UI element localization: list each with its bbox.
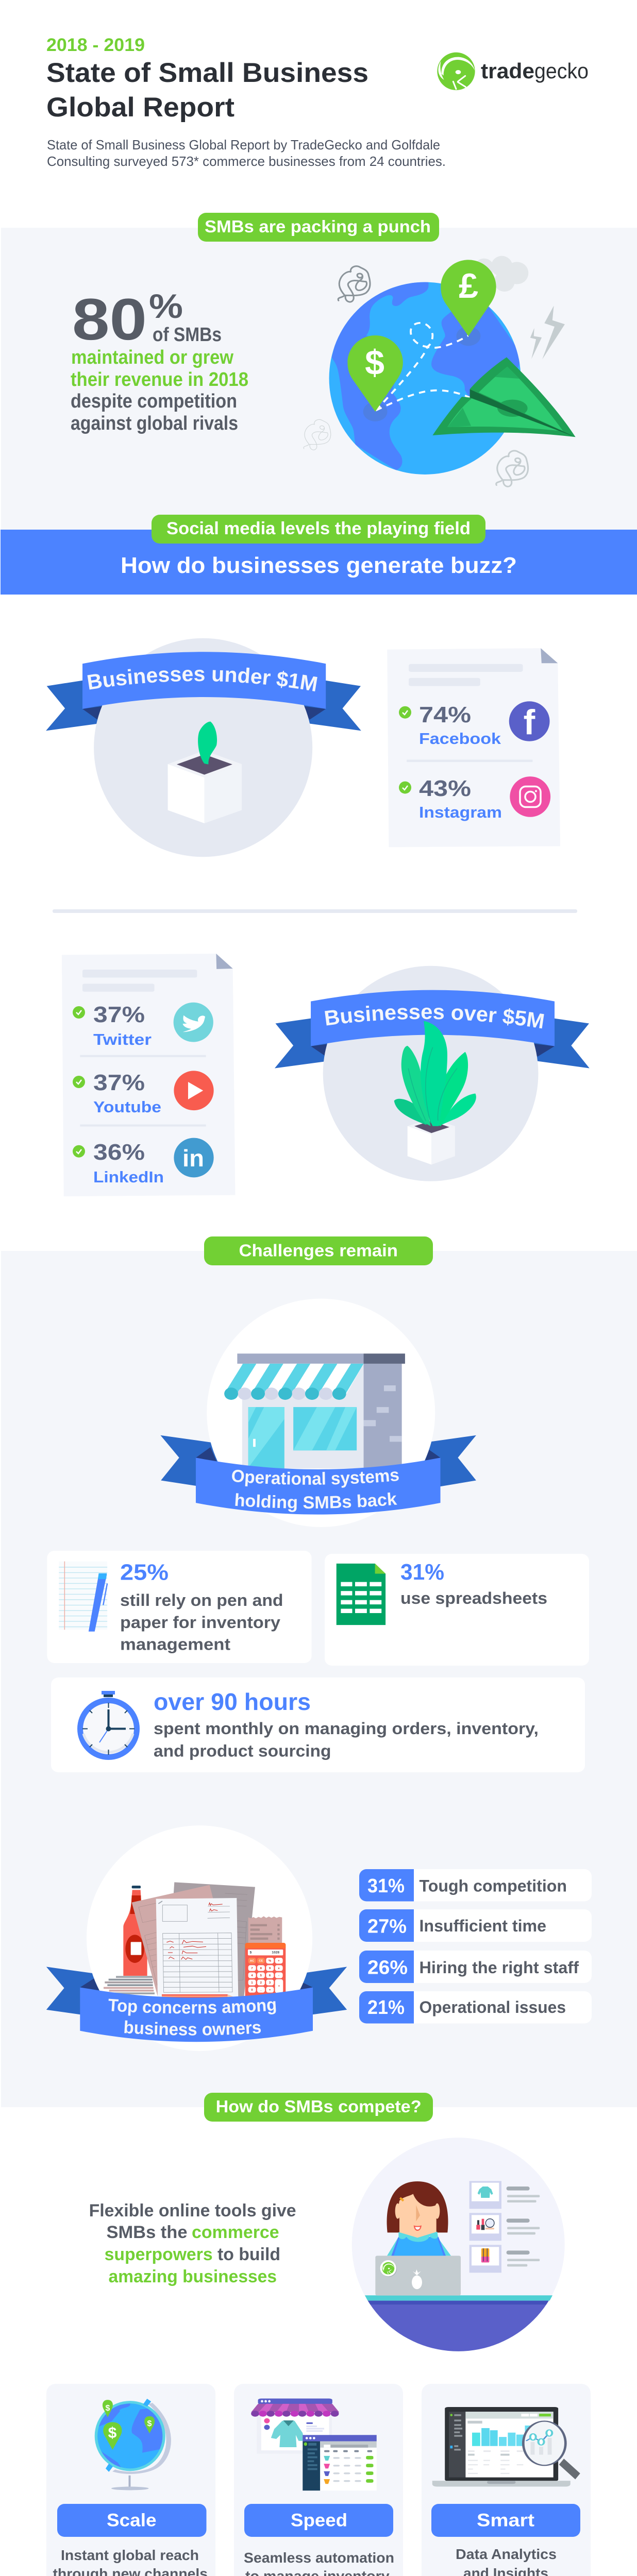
document card — [387, 648, 560, 847]
illustration: store front and ribbon: holding SMBs back — [235, 1492, 397, 1512]
pink document — [132, 1885, 237, 1997]
instagram stat: 43% — [419, 776, 471, 801]
text block: superpowers — [105, 2245, 213, 2264]
card: smart: Data Analytics — [456, 2546, 557, 2562]
icon: stopwatch — [80, 1691, 137, 1757]
ribbon text — [108, 2010, 277, 2013]
twitter stat: Twitter — [93, 1030, 152, 1048]
calculator: $ — [250, 1951, 252, 1955]
pencil — [162, 1994, 236, 1998]
backdrop circle — [94, 638, 312, 857]
section pill: Challenges remain — [239, 1241, 398, 1260]
illustration: shop owner — [349, 2138, 569, 2352]
row: tough competition: Tough competition — [420, 1876, 567, 1895]
calculator: 3 — [269, 1981, 271, 1985]
section pill: Social media levels the playing field — [166, 519, 471, 538]
ribbon band — [311, 990, 555, 1046]
calculator: 9 — [269, 1967, 271, 1970]
receipt — [248, 1916, 282, 1944]
card: spreadsheets: 31% — [400, 1560, 444, 1585]
card: smart — [422, 2384, 591, 2576]
section pill: How do SMBs compete? — [216, 2097, 422, 2116]
invoice — [156, 1898, 238, 1997]
calculator: - — [278, 1974, 279, 1977]
illustration: top concerns: Top concerns among — [108, 1999, 276, 2016]
panel: channels list, small businesses — [387, 648, 560, 847]
calculator: 8 — [260, 1967, 262, 1970]
calculator: 1028 — [272, 1951, 279, 1955]
80% stat: 80 — [72, 287, 147, 352]
80% stat: % — [149, 287, 183, 325]
illustration: store front and ribbon — [161, 1298, 476, 1527]
list: concerns — [359, 1869, 592, 2024]
calculator: + — [278, 1960, 280, 1963]
ribbon text — [231, 1481, 400, 1485]
intro text: State of Small Business Global Report by TradeGecko and Golfdale — [47, 137, 440, 152]
lightning — [530, 306, 565, 359]
dashed routes — [376, 323, 470, 411]
pin shadows — [363, 326, 480, 421]
illustration: top concerns: business owners — [124, 2021, 261, 2036]
woman — [387, 2181, 451, 2256]
row: tough competition — [359, 1869, 592, 1901]
product: cosmetics — [476, 2219, 494, 2230]
banner heading: How do businesses generate buzz? — [121, 553, 517, 578]
instagram stat: Instagram — [419, 803, 502, 821]
paperwork pile — [104, 1882, 286, 1999]
text block — [89, 2201, 296, 2286]
globe — [329, 278, 522, 474]
80% stat: their revenue in 2018 — [71, 369, 248, 391]
store — [224, 1353, 405, 1468]
illustration: globe with pins and money plane — [304, 256, 576, 486]
row: tough competition: 31% — [367, 1875, 405, 1897]
card: scale: Instant global reach — [61, 2547, 199, 2563]
laptop — [375, 2256, 461, 2296]
card: spreadsheets — [325, 1554, 589, 1666]
linkedin glyph: in — [182, 1145, 204, 1172]
panel: businesses under $1M: Businesses under $1M — [88, 668, 317, 691]
panel: social media banner — [1, 515, 637, 595]
scribbles — [304, 266, 528, 486]
card: pen and paper: management — [120, 1635, 230, 1654]
panel: SMBs are packing a punch — [1, 213, 637, 530]
backdrop circle — [323, 966, 538, 1181]
card: scale — [46, 2384, 215, 2576]
linkedin stat: LinkedIn — [93, 1168, 164, 1186]
row: insufficient time — [359, 1909, 592, 1942]
panel: businesses over $5M: Businesses over $5M — [325, 1006, 544, 1028]
text block: SMBs the — [106, 2223, 188, 2242]
document card — [62, 954, 235, 1196]
product: backpack — [481, 2248, 489, 2262]
youtube stat — [73, 1070, 161, 1116]
card: pen and paper: paper for inventory — [120, 1613, 280, 1632]
linkedin circle — [174, 1138, 214, 1177]
row: operational issues — [359, 1991, 592, 2024]
ribbon band — [196, 1458, 441, 1515]
text block: amazing businesses — [108, 2267, 277, 2286]
bottle — [123, 1886, 147, 1976]
illustration: top concerns — [46, 1826, 347, 2050]
card: smart: Smart — [477, 2510, 534, 2531]
calculator: 6 — [269, 1974, 271, 1977]
80% stat: of SMBs — [153, 324, 222, 346]
title: Global Report — [46, 92, 234, 123]
section pill — [152, 515, 485, 544]
section pill — [204, 1236, 433, 1265]
icon: desk globe — [89, 2399, 169, 2490]
card: speed: Speed — [291, 2510, 347, 2531]
card: speed — [234, 2384, 403, 2576]
section pill — [198, 213, 439, 242]
icon: desk globe: $ — [106, 2404, 110, 2413]
facebook stat — [399, 702, 501, 748]
panel: businesses over $5M — [275, 965, 590, 1181]
twitter stat — [73, 1002, 152, 1048]
row: hiring the right staff: 26% — [367, 1957, 408, 1978]
pins — [347, 260, 496, 412]
card: over 90 hours: spent monthly on managing orders, inventory, — [154, 1719, 539, 1738]
text block: commerce — [192, 2223, 279, 2242]
title — [46, 58, 368, 123]
facebook circle — [509, 701, 550, 741]
section pill — [204, 2093, 433, 2122]
calculator: 2 — [260, 1981, 262, 1985]
product cards — [470, 2181, 540, 2273]
icon: desk globe: $ — [147, 2419, 152, 2428]
youtube icon — [174, 1071, 214, 1110]
card: pen and paper: 25% — [120, 1560, 169, 1585]
year label: 2018 - 2019 — [46, 35, 145, 55]
icon: online store windows — [251, 2398, 377, 2490]
calculator: 1 — [251, 1981, 253, 1985]
plant — [394, 1021, 476, 1164]
ribbon tails — [46, 1967, 347, 2014]
panel: businesses under $1M — [46, 638, 361, 857]
text block: Flexible online tools give — [89, 2201, 296, 2221]
calculator: + — [278, 1985, 280, 1988]
card: over 90 hours — [51, 1677, 585, 1772]
card: over 90 hours: over 90 hours — [154, 1688, 311, 1715]
card: pen and paper: still rely on pen and — [120, 1591, 283, 1609]
pound sign: £ — [459, 266, 478, 306]
calculator: 7 — [251, 1967, 253, 1970]
80% stat — [71, 287, 248, 434]
facebook stat: 74% — [419, 702, 471, 727]
panel: challenges remain — [1, 1236, 637, 2107]
icon: spreadsheet — [337, 1564, 385, 1625]
instagram stat — [399, 776, 502, 821]
calculator: AC — [250, 1960, 254, 1963]
card: spreadsheets: use spreadsheets — [400, 1589, 547, 1607]
row: hiring the right staff: Hiring the right staff — [420, 1958, 579, 1977]
youtube stat: 37% — [93, 1070, 145, 1095]
instagram circle — [510, 776, 550, 817]
intro text — [47, 137, 446, 169]
cloud — [474, 256, 528, 292]
row: operational issues: Operational issues — [420, 1998, 566, 2016]
linkedin stat: 36% — [93, 1140, 145, 1165]
header — [46, 35, 589, 169]
ribbon band — [82, 652, 326, 709]
80% stat: despite competition — [71, 391, 237, 412]
calculator: x — [278, 1967, 280, 1970]
title: State of Small Business — [46, 58, 368, 88]
calculator: 4 — [251, 1974, 253, 1977]
twitter icon — [174, 1003, 213, 1042]
youtube stat: Youtube — [93, 1098, 161, 1116]
product detail lines — [507, 2187, 540, 2266]
logo — [437, 53, 589, 90]
calculator: . — [261, 1989, 262, 1992]
ribbon tails — [275, 1014, 590, 1068]
text block: to build — [217, 2245, 280, 2264]
product: shirt — [478, 2187, 493, 2198]
paper plane — [432, 357, 576, 437]
row: insufficient time: 27% — [367, 1916, 407, 1937]
logo: trade — [481, 59, 534, 83]
icon: laptop analytics — [432, 2407, 580, 2487]
instagram icon — [520, 786, 541, 807]
calculator: = — [269, 1989, 271, 1992]
panel: channels list, larger businesses — [62, 954, 235, 1196]
icon: notepad and pen — [59, 1562, 107, 1632]
card: scale: Scale — [107, 2510, 157, 2531]
row: operational issues: 21% — [367, 1997, 405, 2019]
plant pot — [168, 722, 242, 823]
panel: how do SMBs compete — [46, 2093, 591, 2576]
calculator — [245, 1943, 286, 1998]
section pill: SMBs are packing a punch — [205, 217, 431, 236]
card: pen and paper — [47, 1551, 312, 1663]
ribbon text — [88, 681, 317, 692]
illustration: store front and ribbon: Operational systems — [232, 1469, 399, 1488]
card: over 90 hours: and product sourcing — [154, 1741, 331, 1760]
calculator: 5 — [260, 1974, 262, 1977]
80% stat: maintained or grew — [71, 347, 233, 368]
ribbon tails — [160, 1435, 476, 1489]
linkedin stat — [73, 1140, 164, 1186]
calculator: 0 — [251, 1989, 253, 1992]
ribbon band — [80, 1988, 313, 2042]
intro text: Consulting surveyed 573* commerce businesses from 24 countries. — [47, 154, 446, 169]
twitter stat: 37% — [93, 1002, 145, 1027]
ribbon text — [325, 1019, 544, 1029]
ribbon tails — [46, 677, 361, 731]
logo: gecko — [534, 59, 589, 83]
calculator: CE — [259, 1960, 263, 1963]
dollar sign: $ — [365, 343, 384, 382]
row: hiring the right staff — [359, 1951, 592, 1983]
card: speed: Seamless automation — [244, 2550, 394, 2566]
calculator: % — [269, 1960, 271, 1963]
back document — [166, 1882, 255, 1999]
80% stat: against global rivals — [71, 413, 238, 434]
icon: desk globe: $ — [108, 2425, 117, 2442]
facebook icon: f — [524, 703, 535, 742]
row: insufficient time: Insufficient time — [420, 1917, 546, 1935]
facebook stat: Facebook — [419, 730, 501, 748]
